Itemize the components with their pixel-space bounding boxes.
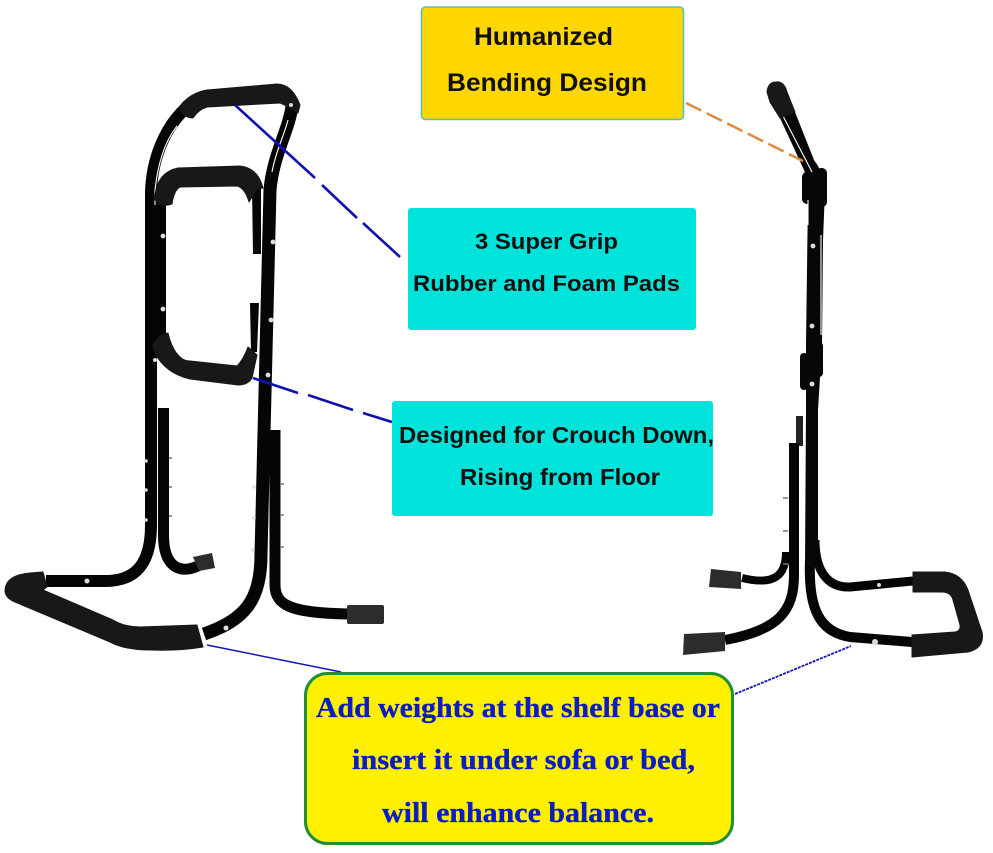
callout: super grip pads: Rubber and Foam Pads xyxy=(413,271,680,296)
product: front view of support frame xyxy=(5,84,384,650)
callout: crouch down and rising: Designed for Crouch Down, xyxy=(399,422,714,448)
bolts xyxy=(783,244,881,645)
rubber foot caps xyxy=(193,553,384,624)
foam pad: side view base bar xyxy=(912,572,982,657)
product: side view of support frame xyxy=(683,82,982,657)
callout: add weights for balance: insert it under sofa or bed, xyxy=(352,744,695,776)
callout: add weights for balance: Add weights at the shelf base or xyxy=(316,692,720,724)
callout: super grip pads: 3 Super Grip xyxy=(475,229,618,254)
rubber foot caps xyxy=(683,569,741,655)
foam pad: top handle xyxy=(180,84,300,118)
callout: humanized bending design: Bending Design xyxy=(447,69,647,97)
leader line: right base to weights callout xyxy=(735,646,851,694)
foam pad: base bar xyxy=(5,572,203,650)
leader line: left base to weights callout xyxy=(207,645,341,672)
foam pad: side view handle xyxy=(767,82,795,118)
callout: add weights for balance: will enhance balance. xyxy=(382,797,654,829)
callout: super grip pads xyxy=(408,208,696,330)
bolts xyxy=(84,103,293,630)
foam pad: middle handle xyxy=(155,166,263,205)
leader line: lower pad to crouch callout xyxy=(253,378,392,422)
callout: add weights for balance xyxy=(306,674,732,844)
leader line: bend to design callout xyxy=(686,103,803,161)
callout: humanized bending design xyxy=(422,7,684,120)
callout: humanized bending design: Humanized xyxy=(474,23,613,51)
leader line: top pad to grip callout xyxy=(235,105,400,257)
callout: crouch down and rising: Rising from Floor xyxy=(460,464,660,490)
callout: crouch down and rising xyxy=(392,401,714,516)
foam pad: lower handle xyxy=(153,333,257,385)
